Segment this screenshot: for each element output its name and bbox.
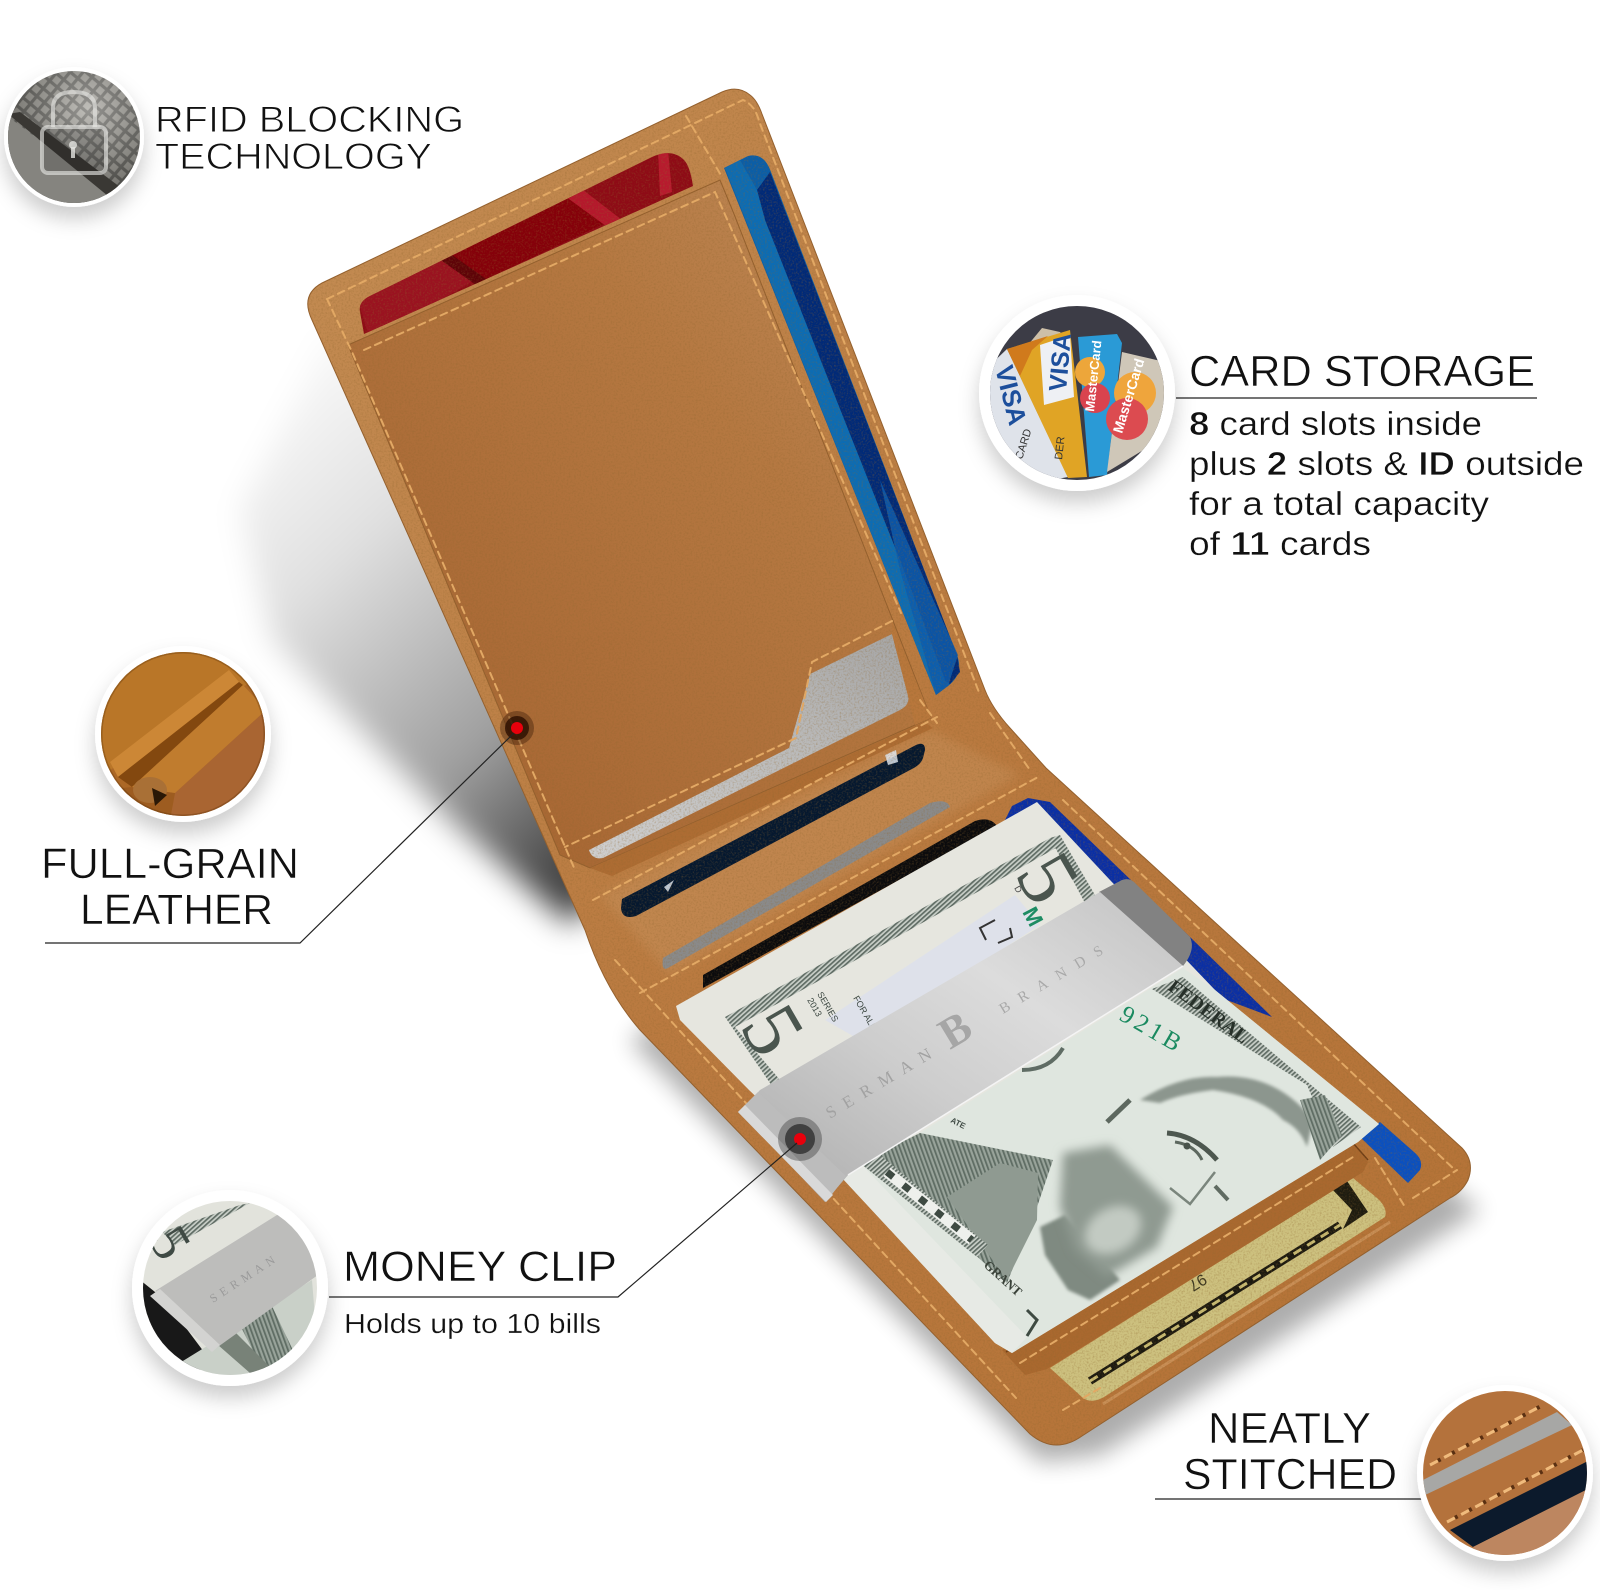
blue card xyxy=(724,155,960,695)
stack of bills xyxy=(676,802,1379,1353)
card engraved border xyxy=(1090,1225,1340,1381)
card storage text: of 11 cards xyxy=(1189,525,1371,562)
heading: neatly stitched xyxy=(1183,1404,1397,1499)
icon: fanned cards: MasterCard xyxy=(1110,357,1147,435)
icon: money clip thumbnail xyxy=(132,1190,328,1386)
brow and eye xyxy=(1167,1133,1217,1160)
marker: clip xyxy=(778,1117,822,1161)
navy card slot xyxy=(621,744,925,917)
icon: fanned cards: DER xyxy=(1053,436,1067,460)
numeral 5: 5 xyxy=(723,990,823,1071)
engraved brand: BRANDS xyxy=(997,943,1106,1017)
heading: RFID blocking technology xyxy=(155,99,464,177)
beige back card xyxy=(1031,328,1061,342)
stack of bills: FOR ALL xyxy=(851,994,878,1031)
gray card slot xyxy=(663,801,950,969)
clip face xyxy=(740,892,1183,1202)
right edge engraving xyxy=(1300,1095,1342,1160)
clip lower highlight xyxy=(848,966,1183,1175)
hair xyxy=(1140,1077,1313,1147)
beard xyxy=(1060,1145,1173,1277)
engraved brand: B xyxy=(930,1001,980,1059)
federal band xyxy=(1152,977,1361,1147)
heading: RFID blocking technology: TECHNOLOGY xyxy=(155,136,432,177)
card storage text xyxy=(1189,347,1584,562)
left strip ornaments xyxy=(860,1155,988,1257)
wallet xyxy=(290,80,1490,1460)
icon: money clip thumbnail: SERMAN xyxy=(207,1250,282,1306)
money clip detail: Holds up to 10 bills xyxy=(344,1308,601,1339)
card storage text: for a total capacity xyxy=(1189,485,1490,522)
stack of bills: 5 xyxy=(998,838,1098,919)
lower bill engraving xyxy=(860,976,1361,1336)
leather strip right of card xyxy=(892,621,931,725)
leader line: full-grain leather xyxy=(45,733,514,943)
leader line: card storage xyxy=(1176,397,1537,399)
heading: full-grain leather: LEATHER xyxy=(80,886,273,934)
red card xyxy=(360,153,693,334)
ear marks xyxy=(1107,1100,1130,1122)
icon: fanned cards: VISA xyxy=(989,362,1033,429)
marker: leather xyxy=(500,711,534,745)
black card slot xyxy=(703,819,997,988)
lower eye xyxy=(1215,1186,1228,1200)
card storage text: 8 card slots inside xyxy=(1189,405,1482,442)
heading: money clip: MONEY CLIP xyxy=(343,1243,617,1291)
leader line: neatly stitched xyxy=(1155,1498,1425,1500)
icon: fanned cards: CARD xyxy=(1013,428,1035,461)
lower bill shaded edge xyxy=(780,1130,1027,1353)
upper bill light panel xyxy=(825,895,1040,1040)
stack of bills: D xyxy=(1012,884,1024,895)
lower blue card xyxy=(1000,798,1421,1183)
nose xyxy=(1170,1172,1215,1204)
heading: neatly stitched: STITCHED xyxy=(1183,1450,1397,1499)
icon: stitching thumbnail xyxy=(1417,1385,1593,1561)
card storage text: plus 2 slots & ID outside xyxy=(1189,445,1584,482)
top seal arc xyxy=(1022,1048,1063,1070)
heading: full-grain leather: FULL-GRAIN xyxy=(41,840,299,888)
coat xyxy=(860,1133,1053,1283)
visa label xyxy=(1040,335,1074,405)
gold card: 97 xyxy=(1185,1270,1209,1294)
heading: full-grain leather xyxy=(41,840,299,934)
heading: money clip xyxy=(343,1243,617,1339)
serial mark: M xyxy=(1018,903,1048,931)
icon: RFID lock xyxy=(0,67,144,215)
fold highlight xyxy=(600,730,1020,975)
folded back end xyxy=(1099,879,1192,966)
series text: SERIES xyxy=(815,990,840,1024)
clip rounded left end xyxy=(738,1092,846,1202)
gold card xyxy=(1050,1178,1386,1401)
icon: fanned cards: MasterCard xyxy=(1082,340,1104,412)
card storage text: CARD STORAGE xyxy=(1189,347,1535,396)
bills paper xyxy=(676,802,1379,1353)
wallet body xyxy=(308,89,1470,1445)
cast shadow of the wallet xyxy=(240,330,1480,1462)
icon: money clip thumbnail: 5 xyxy=(138,1216,203,1269)
lower bill engraving: FEDERAL xyxy=(1164,976,1252,1048)
blue card xyxy=(1078,334,1122,477)
engraved brand xyxy=(822,943,1106,1122)
front pocket xyxy=(348,180,933,876)
lower bill tint xyxy=(845,968,1379,1353)
gray metal card xyxy=(589,634,908,858)
band below the card xyxy=(590,722,933,876)
pocket band above gold card xyxy=(1002,1142,1368,1375)
heading: neatly stitched: NEATLY xyxy=(1208,1404,1371,1453)
grant plate: GRANT xyxy=(981,1257,1025,1299)
beige card xyxy=(1107,352,1170,472)
lower edge seam xyxy=(1103,1222,1390,1404)
stack of bills: 2013 xyxy=(805,996,824,1018)
heading: RFID blocking technology: RFID BLOCKING xyxy=(155,99,464,140)
grain texture xyxy=(290,80,1490,1460)
gold card xyxy=(1007,330,1087,478)
leader line: money clip xyxy=(329,1143,797,1297)
icon: fanned cards xyxy=(979,295,1175,491)
collar xyxy=(1040,1215,1120,1300)
icon: fanned cards: VISA xyxy=(1044,332,1077,393)
stitching xyxy=(327,100,1457,1410)
state text: ATE xyxy=(949,1116,967,1131)
icon: rolled leather xyxy=(95,646,271,822)
white card xyxy=(985,349,1068,482)
upper bill engraved border xyxy=(725,838,1056,1086)
engraved brand: SERMAN xyxy=(822,1044,935,1122)
money clip xyxy=(738,879,1192,1202)
serial number: 921B xyxy=(1115,1001,1186,1057)
